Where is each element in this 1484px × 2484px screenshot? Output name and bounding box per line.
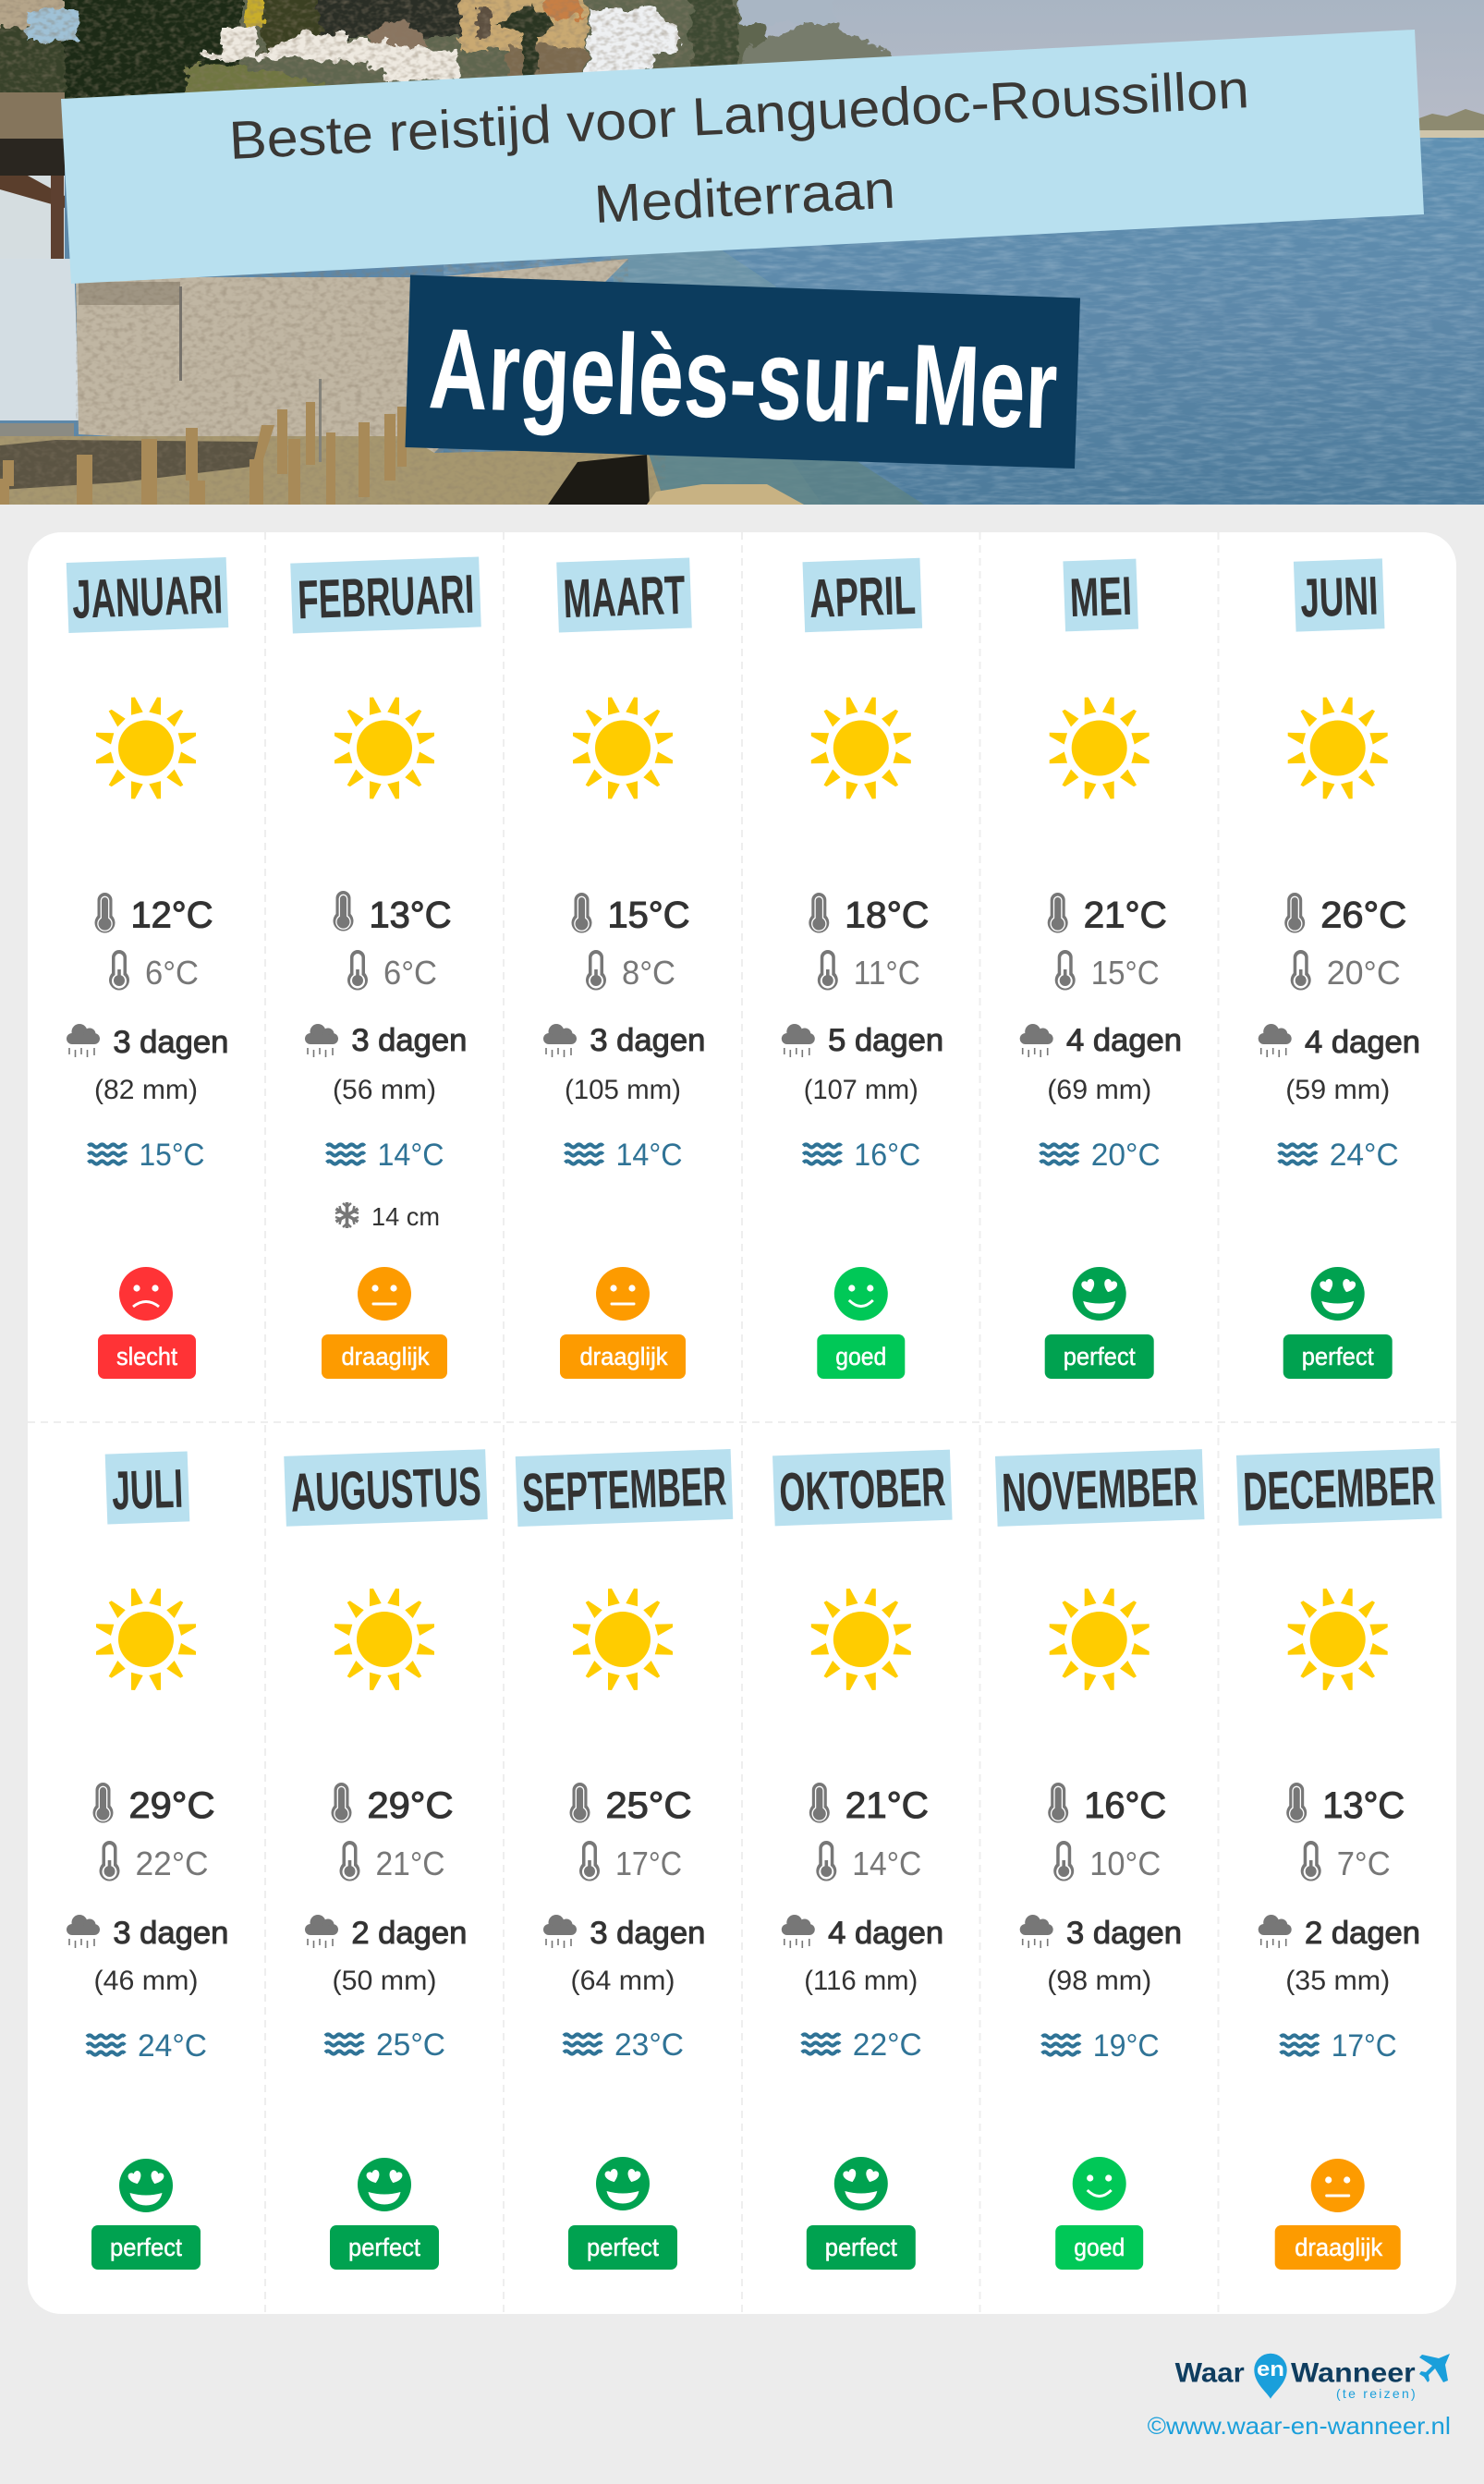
city banner (405, 275, 1080, 469)
rain days: 3 dagen (113, 1916, 228, 1951)
min temperature: 15°C (1091, 954, 1160, 992)
icon: rating face (1073, 1267, 1126, 1321)
city name: Argelès-sur-Mer (427, 305, 1059, 454)
month label: NOVEMBER (1001, 1455, 1198, 1524)
icon: rain cloud (67, 1915, 100, 1948)
month label (556, 558, 692, 632)
sea temperature: 15°C (139, 1138, 205, 1173)
icon: sun (335, 697, 434, 798)
rating badge (817, 1334, 905, 1379)
rating badge (1055, 2225, 1143, 2270)
icon: rain cloud (1259, 1915, 1292, 1948)
max temperature: 13°C (1322, 1785, 1405, 1826)
sea temperature: 24°C (1330, 1138, 1399, 1173)
rain days: 3 dagen (590, 1023, 705, 1058)
rating badge: draaglijk (580, 1343, 668, 1370)
icon: waves (327, 1144, 364, 1164)
icon: max thermometer (1286, 1783, 1307, 1823)
sea temperature: 19°C (1093, 2028, 1160, 2064)
icon: rain cloud (1020, 1024, 1053, 1057)
icon: waves (566, 1144, 602, 1164)
icon: rating face (1311, 2159, 1365, 2212)
rainfall: (116 mm) (804, 1966, 918, 1996)
rainfall: (35 mm) (1285, 1966, 1390, 1996)
month label: AUGUSTUS (289, 1455, 482, 1524)
month label: OKTOBER (778, 1456, 946, 1523)
icon: min thermometer (340, 1841, 360, 1881)
title banner (61, 30, 1424, 284)
icon: waves (803, 1144, 841, 1164)
min temperature: 14°C (852, 1845, 921, 1882)
min temperature: 22°C (135, 1845, 209, 1882)
icon: sun (573, 697, 673, 798)
icon: snowflake (335, 1202, 359, 1228)
month: April (782, 558, 943, 1379)
rain days: 4 dagen (1305, 1025, 1420, 1060)
icon: max thermometer (809, 893, 829, 933)
icon: waves (87, 2035, 125, 2055)
rain days: 3 dagen (590, 1916, 705, 1951)
rating badge: draaglijk (342, 1343, 430, 1370)
min temperature: 6°C (145, 954, 199, 992)
sea temperature: 16°C (854, 1138, 920, 1173)
month: Maart (543, 558, 705, 1379)
icon: rain cloud (543, 1024, 577, 1057)
min temperature: 21°C (375, 1845, 445, 1882)
icon: min thermometer (816, 1841, 836, 1881)
icon: rain cloud (1020, 1915, 1053, 1948)
icon: rain cloud (782, 1024, 815, 1057)
rating badge: perfect (110, 2234, 182, 2261)
rain days: 2 dagen (1305, 1916, 1420, 1951)
rain days: 4 dagen (1066, 1023, 1182, 1058)
rating badge: perfect (1302, 1343, 1374, 1370)
min temperature: 7°C (1337, 1845, 1391, 1882)
icon: min thermometer (586, 950, 606, 991)
icon: max thermometer (94, 893, 115, 933)
icon: sun (1050, 697, 1149, 798)
rainfall: (59 mm) (1285, 1075, 1390, 1105)
icon: min thermometer (818, 950, 838, 991)
icon: sun (811, 1589, 911, 1690)
rating badge: perfect (587, 2234, 659, 2261)
sea temperature: 20°C (1091, 1138, 1161, 1173)
max temperature: 29°C (129, 1785, 214, 1826)
icon: rating face (596, 1267, 650, 1321)
rainfall: (105 mm) (565, 1075, 681, 1105)
icon: max thermometer (1048, 893, 1068, 933)
rainfall: (107 mm) (804, 1075, 918, 1105)
icon: max thermometer (1048, 1783, 1068, 1823)
rating badge: goed (1074, 2234, 1125, 2261)
logo word: Waar: Waar (1175, 2358, 1245, 2389)
rating badge (322, 1334, 447, 1379)
rating badge: perfect (825, 2234, 897, 2261)
month: Juni (1259, 558, 1420, 1379)
max temperature: 21°C (1084, 895, 1167, 935)
icon: waves (89, 1144, 126, 1164)
month label (772, 1450, 953, 1526)
source url: ©www.waar-en-wanneer.nl (1148, 2412, 1451, 2440)
icon: rating face (358, 1267, 411, 1321)
icon: sun (1288, 1589, 1388, 1690)
icon: rain cloud (782, 1915, 815, 1948)
icon: rating face (1073, 2157, 1126, 2210)
rating badge (330, 2225, 439, 2270)
icon: min thermometer (579, 1841, 600, 1881)
icon: rain cloud (305, 1024, 338, 1057)
icon: rating face (119, 1267, 173, 1321)
max temperature: 21°C (845, 1785, 929, 1826)
month label (284, 1449, 488, 1527)
icon: waves (1279, 1144, 1317, 1164)
rainfall: (50 mm) (332, 1966, 437, 1996)
month: December (1236, 1448, 1441, 2270)
max temperature: 15°C (608, 895, 689, 935)
rating badge: slecht (116, 1343, 177, 1370)
rainfall: (69 mm) (1047, 1075, 1151, 1105)
rainfall: (56 mm) (333, 1075, 436, 1105)
icon: rating face (1311, 1267, 1365, 1321)
rain days: 3 dagen (1066, 1916, 1182, 1951)
month label (1294, 558, 1384, 632)
month: November (995, 1449, 1204, 2270)
month: Februari (290, 556, 481, 1379)
month label: MAART (562, 565, 687, 629)
month label: FEBRUARI (297, 564, 475, 630)
sea temperature: 25°C (376, 2027, 445, 2063)
panel: climate table card (28, 532, 1456, 2314)
icon: sun (811, 697, 911, 798)
rating badge: draaglijk (1295, 2234, 1383, 2261)
month label (67, 557, 228, 633)
month: Augustus (284, 1449, 488, 2270)
logo: Waar en Wanneer (1175, 2354, 1450, 2401)
max temperature: 18°C (845, 895, 929, 935)
sea temperature: 23°C (614, 2027, 684, 2063)
icon: min thermometer (1055, 950, 1076, 991)
icon: airplane (1419, 2354, 1450, 2382)
month label (1063, 559, 1138, 631)
month label: MEI (1069, 566, 1133, 628)
month: Mei (1020, 559, 1182, 1379)
max temperature: 29°C (368, 1785, 453, 1826)
rain days: 5 dagen (828, 1023, 943, 1058)
month label (290, 556, 481, 634)
max temperature: 12°C (131, 895, 213, 935)
icon: waves (1281, 2035, 1319, 2055)
icon: min thermometer (1301, 1841, 1321, 1881)
min temperature: 17°C (615, 1845, 682, 1882)
rain days: 2 dagen (351, 1916, 467, 1951)
max temperature: 26°C (1320, 895, 1406, 935)
sea temperature: 22°C (853, 2027, 922, 2063)
title line 2: Mediterraan (592, 160, 896, 235)
rating badge (91, 2225, 201, 2270)
icon: min thermometer (1291, 950, 1311, 991)
min temperature: 10°C (1089, 1845, 1161, 1882)
sea temperature: 17°C (1332, 2028, 1397, 2064)
rainfall: (98 mm) (1047, 1966, 1151, 1996)
icon: min thermometer (347, 950, 368, 991)
logo tagline: (te reizen) (1336, 2386, 1416, 2401)
icon: max thermometer (809, 1783, 830, 1823)
sea temperature: 14°C (615, 1138, 682, 1173)
icon: waves (1040, 1144, 1078, 1164)
month label (803, 558, 922, 632)
rain days: 4 dagen (828, 1916, 943, 1951)
icon: max thermometer (333, 891, 353, 932)
rating badge (98, 1334, 196, 1379)
rating badge (1045, 1334, 1154, 1379)
icon: rating face (358, 2158, 411, 2211)
rating badge (1275, 2225, 1401, 2270)
month label (995, 1449, 1204, 1527)
logo word: en: en (1257, 2357, 1284, 2380)
month label (516, 1449, 733, 1527)
max temperature: 13°C (370, 895, 451, 935)
logo word: Wanneer: Wanneer (1291, 2358, 1416, 2389)
icon: sun (96, 697, 196, 798)
icon: max thermometer (571, 893, 591, 933)
month label: JUNI (1299, 566, 1379, 628)
rating badge: goed (835, 1343, 886, 1370)
icon: min thermometer (109, 950, 129, 991)
icon: map pin (1254, 2354, 1287, 2399)
month label: JANUARI (71, 564, 224, 630)
max temperature: 16°C (1084, 1785, 1166, 1826)
icon: sun (335, 1589, 434, 1690)
snow depth: 14 cm (371, 1202, 440, 1231)
max temperature: 25°C (606, 1785, 691, 1826)
icon: rating face (834, 2157, 888, 2210)
rating badge (560, 1334, 686, 1379)
min temperature: 11°C (854, 954, 920, 992)
sea temperature: 24°C (138, 2028, 207, 2064)
month: Oktober (772, 1450, 953, 2270)
month label: SEPTEMBER (521, 1455, 727, 1524)
month label: APRIL (809, 565, 917, 629)
month label: JULI (111, 1458, 184, 1521)
min temperature: 8°C (622, 954, 675, 992)
rain days: 3 dagen (351, 1023, 467, 1058)
icon: waves (325, 2035, 363, 2053)
icon: max thermometer (331, 1783, 351, 1823)
rating badge: perfect (1064, 1343, 1136, 1370)
rating badge (568, 2225, 677, 2270)
icon: waves (1042, 2035, 1080, 2055)
icon: min thermometer (100, 1841, 120, 1881)
icon: waves (802, 2035, 840, 2053)
icon: max thermometer (1284, 893, 1305, 933)
icon: sun (96, 1589, 196, 1690)
month label (105, 1451, 189, 1525)
rating badge: perfect (348, 2234, 420, 2261)
rain days: 3 dagen (113, 1025, 228, 1060)
rating badge (1283, 1334, 1393, 1379)
icon: rating face (119, 2159, 173, 2212)
rainfall: (64 mm) (570, 1966, 675, 1996)
icon: rain cloud (305, 1915, 338, 1948)
icon: sun (1050, 1589, 1149, 1690)
icon: rating face (834, 1267, 888, 1321)
title line 1: Beste reistijd voor Languedoc-Roussillon (227, 59, 1250, 171)
month: Juli (67, 1451, 228, 2270)
icon: max thermometer (569, 1783, 590, 1823)
icon: rain cloud (1259, 1024, 1292, 1057)
icon: sun (573, 1589, 673, 1690)
rating badge (807, 2225, 916, 2270)
sea temperature: 14°C (377, 1138, 444, 1173)
month: Januari (67, 557, 228, 1379)
icon: rain cloud (543, 1915, 577, 1948)
icon: max thermometer (92, 1783, 113, 1823)
header photo: Mediterranean coastline (0, 0, 1484, 505)
min temperature: 20°C (1327, 954, 1401, 992)
icon: sun (1288, 697, 1388, 798)
month: September (516, 1449, 733, 2270)
min temperature: 6°C (383, 954, 437, 992)
rainfall: (46 mm) (93, 1966, 199, 1996)
rainfall: (82 mm) (94, 1075, 198, 1105)
icon: rating face (596, 2157, 650, 2210)
icon: rain cloud (67, 1024, 100, 1057)
icon: min thermometer (1053, 1841, 1074, 1881)
icon: waves (564, 2035, 602, 2053)
